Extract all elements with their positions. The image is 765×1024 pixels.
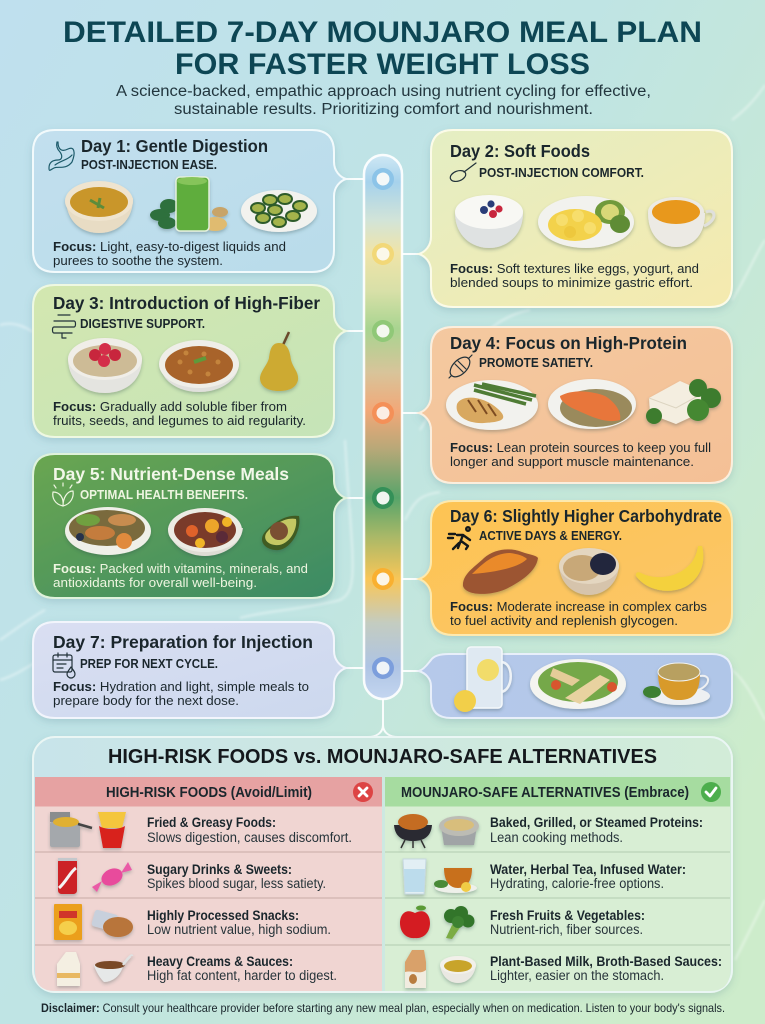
text: processed snacks bbox=[147, 908, 331, 937]
icon: lemon water bbox=[454, 647, 511, 712]
focus text: day 7 bbox=[53, 679, 309, 708]
heading: comparison: HIGH-RISK FOODS vs. MOUNJARO-SAFE ALTERNATIVES bbox=[108, 746, 657, 768]
focus text: day 6: to fuel activity and replenish glycogen. bbox=[450, 613, 678, 628]
panel: day 7 bbox=[33, 622, 346, 718]
icon: fries bbox=[98, 812, 126, 848]
text: heavy creams bbox=[147, 954, 337, 983]
heading: day 2: Day 2: Soft Foods bbox=[450, 141, 590, 161]
text: plant milk and broth: Plant-Based Milk, Broth-Based Sauces: bbox=[490, 954, 722, 969]
icon: grilled fish salad plate bbox=[530, 659, 626, 709]
icon: pastry snacks bbox=[91, 909, 133, 937]
focus text: day 6: Focus: Moderate increase in complex carbs bbox=[450, 599, 707, 614]
icon: soup bowl bbox=[65, 181, 133, 233]
row: baked proteins bbox=[394, 814, 703, 848]
tagline: day 7: PREP FOR NEXT CYCLE. bbox=[80, 657, 218, 671]
focus text: day 4: Focus: Lean protein sources to keep you full bbox=[450, 440, 711, 455]
icon: spoon bbox=[449, 163, 476, 183]
tagline: day 1: POST-INJECTION EASE. bbox=[81, 158, 217, 172]
icon: cucumber plate bbox=[241, 190, 317, 232]
icon: eggs and avocado plate bbox=[538, 196, 634, 248]
heading: day 6: Day 6: Slightly Higher Carbohydrate bbox=[450, 506, 722, 526]
focus text: day 2 bbox=[450, 261, 699, 290]
icon: tofu and broccoli bbox=[646, 379, 721, 424]
icon: cream carton bbox=[57, 952, 80, 986]
tagline: day 3: DIGESTIVE SUPPORT. bbox=[80, 317, 205, 331]
icon: pear bbox=[260, 332, 298, 391]
text: water and tea bbox=[490, 862, 686, 891]
icon: apple bbox=[400, 906, 430, 938]
text: heavy creams: Heavy Creams & Sauces: bbox=[147, 954, 293, 969]
focus text: day 2: blended soups to minimize gastric effort. bbox=[450, 275, 693, 290]
focus text: day 3: fruits, seeds, and legumes to aid regularity. bbox=[53, 413, 306, 428]
timeline node day 6 bbox=[372, 568, 394, 590]
text: plant milk and broth bbox=[490, 954, 722, 983]
icon: water glass bbox=[403, 859, 426, 894]
heading: day 3: Day 3: Introduction of High-Fiber bbox=[53, 293, 320, 313]
icon: red x badge bbox=[353, 782, 373, 802]
panel: day 2 bbox=[419, 130, 732, 307]
text: baked proteins: Baked, Grilled, or Steamed Proteins: bbox=[490, 815, 703, 830]
heading: day 7: Day 7: Preparation for Injection bbox=[53, 632, 313, 652]
icon: leaf sparkle bbox=[53, 483, 73, 506]
text: baked proteins: Lean cooking methods. bbox=[490, 830, 623, 845]
text: processed snacks: Low nutrient value, high sodium. bbox=[147, 922, 331, 937]
text: water and tea: Hydrating, calorie-free options. bbox=[490, 876, 664, 891]
focus text: day 7: prepare body for the next dose. bbox=[53, 693, 239, 708]
column header: safe: MOUNJARO-SAFE ALTERNATIVES (Embrace) bbox=[401, 785, 689, 801]
icon: grilled chicken plate bbox=[446, 380, 538, 430]
icon: broth bowl bbox=[440, 956, 476, 983]
panel: comparison table bbox=[33, 737, 732, 992]
title bbox=[63, 16, 702, 81]
tagline: day 4: PROMOTE SATIETY. bbox=[479, 356, 593, 370]
text: plant milk and broth: Lighter, easier on the stomach. bbox=[490, 968, 664, 983]
panel: day 6 bbox=[419, 501, 732, 635]
icon: calendar bbox=[53, 653, 75, 678]
heading: day 1: Day 1: Gentle Digestion bbox=[81, 136, 268, 156]
focus text: day 7: Focus: Hydration and light, simple meals to bbox=[53, 679, 309, 694]
focus text: day 5 bbox=[53, 561, 308, 590]
row: sugary drinks bbox=[58, 858, 326, 894]
focus text: day 1 bbox=[53, 239, 286, 268]
icon: muscle bbox=[447, 354, 473, 380]
title: FOR FASTER WEIGHT LOSS bbox=[175, 48, 590, 81]
icon: plant milk carton bbox=[405, 950, 426, 988]
focus text: day 3 bbox=[53, 399, 306, 428]
text: fried foods bbox=[147, 815, 352, 845]
icon: banana bbox=[636, 546, 703, 591]
heading: day 5: Day 5: Nutrient-Dense Meals bbox=[53, 464, 289, 484]
row: fruits and vegetables bbox=[400, 906, 645, 939]
icon: roasted vegetable bowl bbox=[168, 508, 243, 556]
row: processed snacks bbox=[54, 904, 331, 940]
text: heavy creams: High fat content, harder to digest. bbox=[147, 968, 337, 983]
focus text: day 1: purees to soothe the system. bbox=[53, 253, 223, 268]
icon: green smoothie bbox=[150, 177, 228, 231]
timeline node day 7 bbox=[372, 657, 394, 679]
text: fruits and vegetables: Fresh Fruits & Vegetables: bbox=[490, 908, 645, 923]
text: processed snacks: Highly Processed Snacks: bbox=[147, 908, 299, 923]
tagline: day 6: ACTIVE DAYS & ENERGY. bbox=[479, 529, 622, 543]
timeline node day 1 bbox=[372, 168, 394, 190]
subtitle: A science-backed, empathic approach using nutrient cycling for effective, bbox=[116, 83, 651, 100]
row: water and tea bbox=[403, 859, 686, 894]
text: fruits and vegetables: Nutrient-rich, fiber sources. bbox=[490, 922, 643, 937]
icon: candy bbox=[92, 862, 132, 892]
icon: soup cup bbox=[648, 197, 714, 247]
icon: gravy boat bbox=[94, 955, 132, 982]
icon: herbal tea bbox=[643, 663, 710, 705]
icon: chips bag bbox=[54, 904, 82, 940]
icon: runner bbox=[448, 527, 470, 549]
panel: day 5 bbox=[33, 454, 346, 598]
row: heavy creams bbox=[57, 952, 337, 986]
focus text: day 4: longer and support muscle maintenance. bbox=[450, 454, 694, 469]
timeline spine bbox=[344, 155, 421, 737]
timeline node day 5 bbox=[372, 487, 394, 509]
text: water and tea: Water, Herbal Tea, Infused Water: bbox=[490, 862, 686, 877]
timeline node day 2 bbox=[372, 243, 394, 265]
icon: intestine bbox=[52, 315, 76, 338]
timeline node day 4 bbox=[372, 402, 394, 424]
text: baked proteins bbox=[490, 815, 703, 845]
icon: grain bowl bbox=[559, 548, 619, 595]
focus text: day 5: Focus: Packed with vitamins, minerals, and bbox=[53, 561, 308, 576]
focus text: day 4 bbox=[450, 440, 711, 469]
text: fried foods: Slows digestion, causes discomfort. bbox=[147, 830, 352, 845]
panel: day 7 foods bbox=[419, 647, 732, 718]
title: DETAILED 7-DAY MOUNJARO MEAL PLAN bbox=[63, 16, 702, 49]
text: sugary drinks: Sugary Drinks & Sweets: bbox=[147, 862, 292, 877]
subtitle: sustainable results. Prioritizing comfort and nourishment. bbox=[174, 101, 593, 118]
text: fried foods: Fried & Greasy Foods: bbox=[147, 815, 276, 830]
subtitle bbox=[116, 83, 651, 118]
icon: avocado bbox=[262, 516, 299, 550]
focus text: day 1: Focus: Light, easy-to-digest liquids and bbox=[53, 239, 286, 254]
row: fried foods bbox=[50, 812, 352, 848]
icon: tea cup bbox=[434, 868, 477, 893]
icon: deep fryer bbox=[50, 812, 92, 847]
icon: broccoli bbox=[444, 906, 474, 939]
tagline: day 2: POST-INJECTION COMFORT. bbox=[479, 166, 644, 180]
focus text: day 2: Focus: Soft textures like eggs, yogurt, and bbox=[450, 261, 699, 276]
column header: high-risk: HIGH-RISK FOODS (Avoid/Limit) bbox=[106, 785, 312, 801]
text: sugary drinks bbox=[147, 862, 326, 891]
heading: day 4: Day 4: Focus on High-Protein bbox=[450, 333, 687, 353]
focus text: day 6 bbox=[450, 599, 707, 628]
icon: salmon plate bbox=[548, 379, 636, 429]
icon: grill bbox=[394, 814, 432, 848]
panel: day 4 bbox=[419, 327, 732, 483]
panel: day 1 bbox=[33, 130, 346, 272]
icon: oatmeal bowl bbox=[68, 338, 142, 393]
column: high-risk foods bbox=[35, 777, 382, 991]
timeline node day 3 bbox=[372, 320, 394, 342]
icon: yogurt bowl bbox=[455, 195, 523, 248]
icon: stomach bbox=[49, 142, 74, 170]
row: plant milk and broth bbox=[405, 950, 722, 988]
icon: shrimp salad plate bbox=[65, 507, 151, 555]
icon: steamer pot bbox=[439, 816, 479, 845]
focus text: day 5: antioxidants for overall well-being. bbox=[53, 575, 257, 590]
icon: green check badge bbox=[701, 782, 721, 802]
focus text: day 3: Focus: Gradually add soluble fiber from bbox=[53, 399, 287, 414]
panel: day 3 bbox=[33, 285, 346, 437]
text: sugary drinks: Spikes blood sugar, less satiety. bbox=[147, 876, 326, 891]
icon: lentil bowl bbox=[159, 340, 239, 392]
text: fruits and vegetables bbox=[490, 908, 645, 937]
column: mounjaro-safe alternatives bbox=[385, 777, 730, 991]
tagline: day 5: OPTIMAL HEALTH BENEFITS. bbox=[80, 488, 248, 502]
icon: sweet potato bbox=[463, 549, 538, 594]
icon: soda can bbox=[58, 858, 77, 894]
